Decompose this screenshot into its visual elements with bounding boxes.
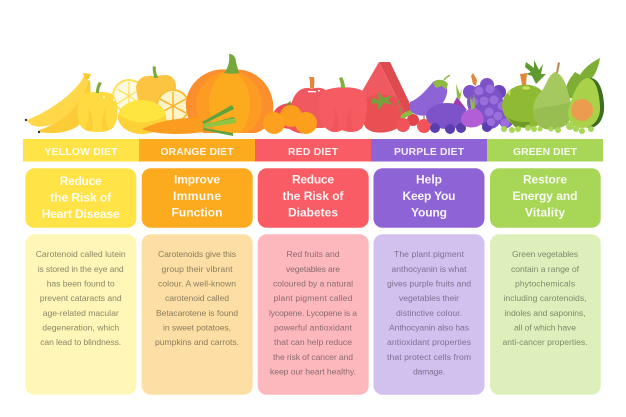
panel: red diet description: keep our heart healthy. xyxy=(270,366,356,376)
illustration: row of fruits and vegetables xyxy=(25,54,604,136)
panel: orange diet description: colour. A well-known xyxy=(158,278,236,288)
icon: pumpkin xyxy=(186,54,273,133)
panel: green diet description: contain a range of xyxy=(511,264,580,274)
panel: purple benefit heading: Young xyxy=(411,205,447,219)
panel: purple diet description xyxy=(374,234,484,395)
panel: orange benefit heading: Function xyxy=(172,205,222,219)
panel: red diet description: coloured by a natural xyxy=(273,278,353,288)
panel: red diet description xyxy=(258,234,369,395)
panel: red benefit heading: the Risk of xyxy=(282,189,344,203)
panel: yellow diet description xyxy=(25,234,136,395)
panel: green benefit heading: Vitality xyxy=(525,205,565,219)
icon: purple bean xyxy=(426,103,468,134)
icon: green apple xyxy=(502,73,548,128)
icon: red bell pepper xyxy=(318,77,367,132)
panel: green diet description: anti-cancer properties. xyxy=(502,337,588,347)
label: yellow diet: YELLOW DIET xyxy=(44,147,118,158)
panel: yellow diet description: degeneration, which xyxy=(42,322,119,332)
icon: eggplant xyxy=(410,75,450,116)
icon: red pepper behind tangerines xyxy=(273,101,309,133)
panel: yellow benefit heading: Heart Disease xyxy=(42,207,120,221)
panel: green diet description: including carotenoids, xyxy=(504,293,586,303)
panel: green diet description: indoles and saponins, xyxy=(504,308,586,318)
panel: purple benefit heading: Help xyxy=(416,173,442,187)
panel: purple diet description: that protect cells from xyxy=(387,352,471,362)
icon: cherries xyxy=(396,100,431,133)
panel: purple benefit heading xyxy=(374,168,484,228)
icon: onion xyxy=(461,92,484,127)
panel: purple diet description: anthocyanin is what xyxy=(392,264,467,274)
icon: avocado xyxy=(568,78,604,128)
panel: orange diet description xyxy=(142,234,253,395)
panel: yellow benefit heading: Reduce xyxy=(60,174,102,188)
panel: orange benefit heading xyxy=(142,168,253,228)
icon: lemon slice xyxy=(112,79,146,113)
icon: watermelon slice xyxy=(350,62,412,116)
panel: yellow diet description: age-related macular xyxy=(43,308,119,318)
label: green diet: GREEN DIET xyxy=(513,147,578,158)
icon: carrot xyxy=(142,105,236,136)
icon: tomato xyxy=(361,92,404,133)
panel: red diet description: the risk of cancer and xyxy=(273,352,353,362)
label: orange diet: ORANGE DIET xyxy=(160,147,234,158)
panel: yellow benefit heading: the Risk of xyxy=(50,190,112,204)
panel: yellow diet description: has been found to xyxy=(47,278,115,288)
panel: purple diet description: The plant pigment xyxy=(394,249,465,259)
icon: tangerines xyxy=(263,105,317,134)
panel: orange diet description: carotenoid called xyxy=(165,293,229,303)
panel: orange diet description: group their vibrant xyxy=(162,264,233,274)
panel: green benefit heading: Restore xyxy=(523,173,567,187)
icon: grapes xyxy=(463,73,513,132)
panel: green benefit heading: Energy and xyxy=(512,189,578,203)
label: purple diet xyxy=(371,139,487,162)
icon: pear xyxy=(533,62,571,130)
panel: red diet description: plant pigment called xyxy=(274,293,353,303)
panel: purple diet description: damage. xyxy=(413,366,445,376)
panel: purple diet description: gives purple fruits and xyxy=(387,278,471,288)
panel: green diet description: phytochemicals xyxy=(515,278,575,288)
panel: red diet description: Red fruits and xyxy=(286,249,340,259)
panel: yellow diet description: is stored in the eye and xyxy=(38,264,124,274)
panel: red diet description: vegetables are xyxy=(286,264,340,274)
icon: orange slice xyxy=(156,89,190,123)
panel: purple diet description: vegetables their xyxy=(399,293,459,303)
diet label band xyxy=(23,139,603,162)
panel: orange benefit heading: Improve xyxy=(174,173,220,187)
icon: yellow pepper xyxy=(77,82,118,132)
panel: red benefit heading: Reduce xyxy=(292,173,334,187)
icon: beet xyxy=(450,84,467,110)
icon: fern leaf xyxy=(525,60,546,84)
label: yellow diet xyxy=(23,139,139,162)
label: red diet xyxy=(255,139,371,162)
icon: bananas xyxy=(25,73,91,133)
panel: orange benefit heading: Immune xyxy=(173,189,221,203)
label: purple diet: PURPLE DIET xyxy=(394,147,465,158)
label: red diet: RED DIET xyxy=(288,147,339,158)
panel: yellow diet description: Carotenoid called lutein xyxy=(36,249,126,259)
panel: purple diet description: antioxidant properties xyxy=(387,337,471,347)
panel: red diet description: lycopene. Lycopene is a xyxy=(269,308,357,318)
panel: purple diet description: Anthocyanin also has xyxy=(389,322,469,332)
panel: orange diet description: pumpkins and carrots. xyxy=(155,337,239,347)
panel: orange diet description: Carotenoids give this xyxy=(158,249,236,259)
panel: green diet description xyxy=(490,234,601,395)
panel: orange diet description: Betacarotene is found xyxy=(156,308,238,318)
panel: green benefit heading xyxy=(490,168,601,228)
panel: red benefit heading: Diabetes xyxy=(288,205,338,219)
panel: yellow diet description: prevent cataracts and xyxy=(40,293,122,303)
panel: yellow diet description: can lead to blindness. xyxy=(40,337,121,347)
icon: orange-yellow pepper xyxy=(136,66,176,112)
icon: red apple xyxy=(291,77,334,128)
panel: purple diet description: distinctive colour. xyxy=(396,308,462,318)
panel: green diet description: all of which have xyxy=(514,322,576,332)
panel: green diet description: Green vegetables xyxy=(512,249,578,259)
icon: peas xyxy=(501,122,594,134)
panel: purple benefit heading: Keep You xyxy=(402,189,456,203)
icon: lemon xyxy=(118,100,166,134)
label: orange diet xyxy=(139,139,255,162)
label: green diet xyxy=(487,139,603,162)
panel: yellow benefit heading xyxy=(25,168,136,228)
panel: red diet description: that can help reduce xyxy=(274,337,352,347)
panel: orange diet description: in sweet potatoes, xyxy=(163,322,231,332)
panel: red diet description: powerful antioxidant xyxy=(274,322,353,332)
icon: parsley leaf xyxy=(566,58,600,99)
panel: red benefit heading xyxy=(258,168,369,228)
